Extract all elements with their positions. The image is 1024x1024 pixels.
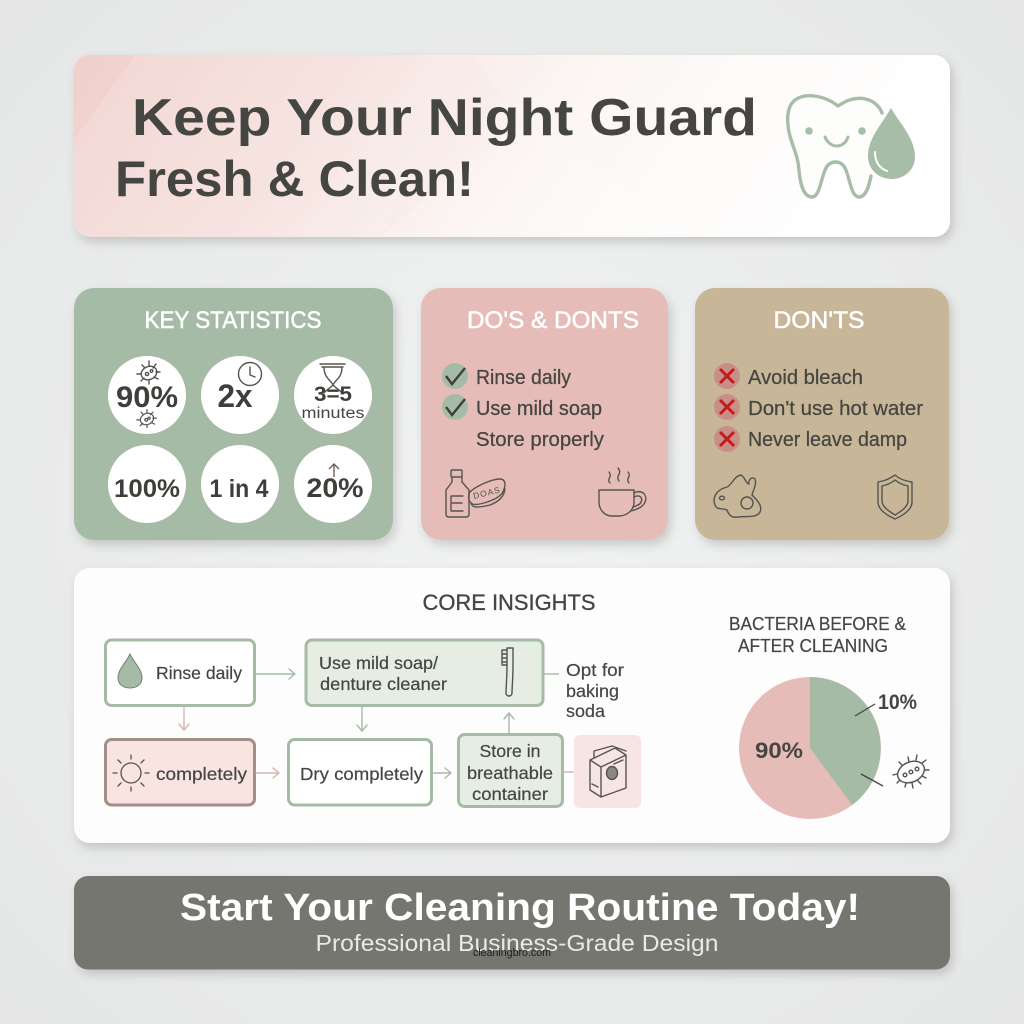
arrow: soap to dry xyxy=(357,707,367,731)
panel: don'ts xyxy=(695,288,949,540)
stat: 1 in 4 xyxy=(201,445,279,523)
heading: pie chart title: BACTERIA BEFORE & xyxy=(729,614,906,634)
icon: baking soda box xyxy=(574,735,641,808)
arrow: completely to dry xyxy=(256,768,279,778)
heading: key statistics: KEY STATISTICS xyxy=(144,307,322,334)
flow box: use mild soap xyxy=(306,640,543,706)
stat: 90%: 90% xyxy=(116,381,178,414)
subtitle: Professional Business-Grade Design xyxy=(316,930,718,956)
list item: never leave damp: Never leave damp xyxy=(748,429,907,451)
list item: don't use hot water xyxy=(714,394,923,420)
icon: flame blob xyxy=(714,475,761,517)
stat: 3-5 minutes: minutes xyxy=(302,405,365,422)
list item: avoid bleach: Avoid bleach xyxy=(748,367,863,389)
panel: call-to-action footer xyxy=(74,876,950,970)
arrow: rinse to soap xyxy=(256,669,295,679)
arrow: rinse to completely xyxy=(179,707,189,730)
title xyxy=(115,89,757,207)
flow box: store in breathable container: Store in xyxy=(480,741,540,761)
headline: Start Your Cleaning Routine Today! xyxy=(180,887,860,929)
list item: store properly: Store properly xyxy=(476,429,604,451)
side note: opt for baking soda: baking xyxy=(566,681,619,701)
icon: bacteria xyxy=(893,755,929,788)
source url: cleaningbro.com xyxy=(473,947,551,959)
stat: 3-5 minutes: 3=5 xyxy=(314,383,352,406)
icon: steaming cup xyxy=(599,468,646,516)
icon: bottle and soap: DOAS xyxy=(472,485,501,501)
arrow: dry to store xyxy=(433,768,451,778)
flow box: store in breathable container: container xyxy=(472,784,548,804)
side note: opt for baking soda: Opt for xyxy=(566,660,624,680)
pie chart: bacteria before and after xyxy=(739,677,929,819)
panel: do's and don'ts xyxy=(421,288,668,540)
flow box: dry completely: Dry completely xyxy=(300,764,423,784)
stat: 90% xyxy=(108,356,186,434)
flow box: completely xyxy=(106,740,254,805)
list item: avoid bleach xyxy=(714,363,863,389)
heading: pie chart title xyxy=(729,614,906,656)
icon: shield xyxy=(878,475,912,519)
side note: opt for baking soda: soda xyxy=(566,701,605,721)
flow box: use mild soap: Use mild soap/ xyxy=(319,653,438,673)
heading: core insights: CORE INSIGHTS xyxy=(422,590,596,615)
pie chart: bacteria before and after: 90% xyxy=(755,738,803,763)
flow box: completely: completely xyxy=(156,764,247,784)
stat: 1 in 4: 1 in 4 xyxy=(210,475,269,503)
panel: header banner xyxy=(74,55,950,237)
side note: opt for baking soda xyxy=(543,660,624,721)
pie chart: bacteria before and after: 10% xyxy=(878,691,917,714)
stat: 20%: 20% xyxy=(306,473,364,503)
heading: do's and donts: DO'S & DONTS xyxy=(467,307,639,334)
list item: use mild soap xyxy=(442,394,602,420)
icon: toothbrush xyxy=(502,648,513,696)
title: Fresh & Clean! xyxy=(115,151,474,207)
icon: smiling tooth with water drop xyxy=(788,96,915,197)
flow box: rinse daily: Rinse daily xyxy=(156,663,242,683)
flow box: rinse daily xyxy=(106,640,254,706)
panel: key statistics xyxy=(74,288,393,540)
list item: rinse daily xyxy=(442,363,571,389)
stat: 100%: 100% xyxy=(114,475,180,503)
icon: bottle and soap xyxy=(446,470,505,517)
stat: 2x: 2x xyxy=(218,378,253,414)
arrow: store up to soap xyxy=(504,713,514,733)
title: Keep Your Night Guard xyxy=(132,89,757,147)
heading: don'ts: DON'TS xyxy=(774,307,864,334)
stat: 20% xyxy=(294,445,372,523)
list item: use mild soap: Use mild soap xyxy=(476,398,602,420)
flow box: dry completely xyxy=(288,740,432,805)
stat: 3-5 minutes xyxy=(294,356,372,434)
stat: 100% xyxy=(108,445,186,523)
list item: rinse daily: Rinse daily xyxy=(476,367,571,389)
panel: core insights xyxy=(74,568,950,843)
flow box: use mild soap: denture cleaner xyxy=(320,674,447,694)
list item: never leave damp xyxy=(714,426,907,452)
stat: 2x xyxy=(201,356,279,434)
flow box: store in breathable container: breathable xyxy=(467,763,553,783)
list item: don't use hot water: Don't use hot water xyxy=(748,398,923,420)
connector: store to soda box xyxy=(563,771,573,773)
heading: pie chart title: AFTER CLEANING xyxy=(738,636,888,656)
flow box: store in breathable container xyxy=(458,734,562,806)
